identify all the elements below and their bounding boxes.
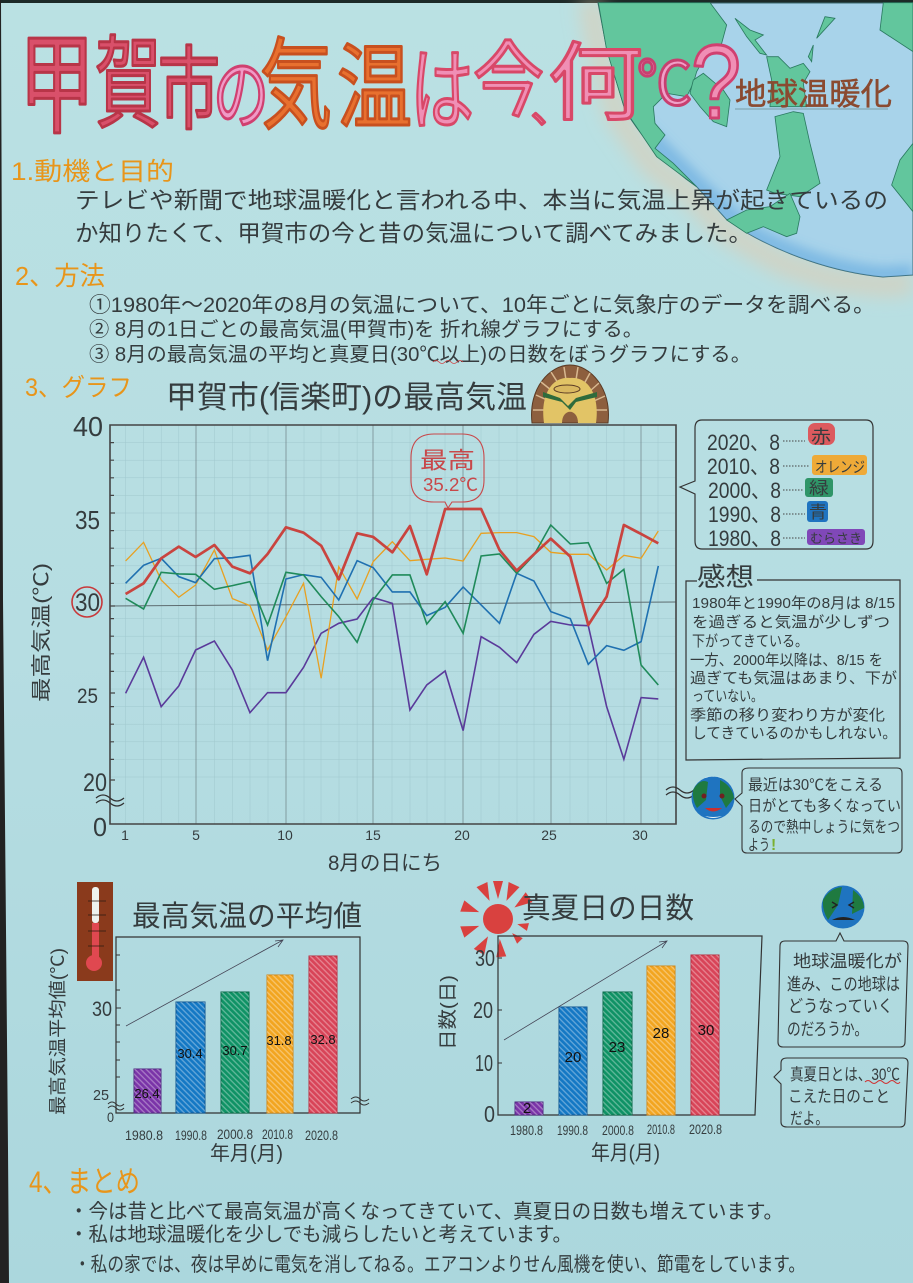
y axis labels: 40	[73, 411, 103, 442]
callout: highest temperature	[411, 434, 484, 508]
title: 市	[158, 41, 220, 141]
axis break marks	[96, 787, 694, 806]
y axis labels: midsummer bars	[473, 945, 495, 1127]
legend text: 緑	[809, 479, 829, 498]
title: 、	[531, 87, 571, 131]
x axis labels: temperature bars: 2010.8	[262, 1126, 293, 1142]
y axis labels: midsummer bars: 0	[484, 1101, 495, 1127]
bar values: 31.8	[266, 1033, 292, 1048]
title: ?	[691, 24, 741, 141]
y axis labels: temperature bars: 0	[107, 1109, 114, 1125]
legend text: むらさき	[810, 531, 862, 546]
y axis labels: 30	[75, 589, 100, 617]
heading: section 2: 2、方法	[15, 261, 105, 291]
callout: what will happen to earth	[778, 933, 908, 1047]
title: 今	[473, 36, 544, 127]
bar values	[134, 1032, 336, 1101]
panel: impressions	[686, 562, 900, 760]
title: 賀	[95, 29, 161, 141]
subtitle: global warming: 地球温暖化	[735, 77, 892, 112]
callout: heatstroke warning	[735, 768, 902, 854]
text block: method: ③ 8月の最高気温の平均と真夏日(30℃以上)の日数をぼうグラフにする。	[89, 343, 751, 366]
bar values: 30	[698, 1022, 714, 1039]
highlight: 30 degree circle	[72, 587, 102, 617]
legend text: 2020、8	[707, 430, 780, 455]
x axis labels: 30	[632, 827, 648, 843]
legend text: 1990、8	[708, 502, 781, 527]
x axis labels: temperature bars: 2020.8	[305, 1127, 338, 1143]
bar values: 30.4	[177, 1046, 203, 1061]
x axis labels: 15	[365, 827, 381, 843]
legend swatches	[805, 423, 867, 545]
callout: what will happen to earth: のだろうか。	[787, 1020, 868, 1039]
text block: method: ② 8月の1日ごとの最高気温(甲賀市)を 折れ線グラフにする。	[89, 318, 643, 341]
x axis labels: midsummer bars: 2010.8	[647, 1121, 675, 1137]
title	[19, 24, 741, 148]
icon: hedgehog	[532, 365, 608, 423]
callout: midsummer day definition	[774, 1058, 908, 1128]
heading: section 4: 4、まとめ	[29, 1166, 140, 1199]
title: は	[410, 42, 474, 142]
y axis labels: temperature bars: 25	[93, 1087, 109, 1104]
x axis title: temperature bars: 年月(月)	[210, 1142, 283, 1165]
bar values: 20	[565, 1049, 581, 1066]
impressions text	[690, 595, 897, 742]
callout: what will happen to earth: どうなっていく	[788, 997, 893, 1016]
bar values: 26.4	[134, 1086, 160, 1101]
title: の	[213, 51, 269, 139]
text block: summary: ・私は地球温暖化を少しでも減らしたいと考えています。	[69, 1223, 572, 1246]
bar: 1990	[559, 1007, 587, 1115]
callout: highest temperature: 最高	[420, 447, 475, 473]
callout: midsummer day definition: こえた日のこと	[788, 1087, 890, 1106]
legend text: 1980、8	[708, 526, 781, 551]
series: 1990 blue	[126, 555, 658, 664]
bar: 1980	[134, 1069, 161, 1113]
x axis labels: temperature bars: 2000.8	[217, 1126, 253, 1142]
x axis labels: midsummer bars: 2020.8	[689, 1121, 722, 1137]
chart frame	[110, 425, 676, 824]
bar: 2010	[267, 975, 293, 1113]
text block: summary	[69, 1200, 805, 1276]
title: 何	[548, 37, 643, 132]
callout: what will happen to earth: 地球温暖化が	[793, 952, 902, 971]
x axis labels: temperature bars	[125, 1126, 338, 1143]
x axis labels: midsummer bars: 1980.8	[510, 1122, 543, 1138]
callout: heatstroke warning: 最近は30℃をこえる	[748, 776, 883, 794]
legend text: オレンジ	[815, 459, 865, 476]
impressions text: 下がってきている。	[692, 633, 808, 650]
bar chart: average high temperature	[108, 937, 369, 1113]
heading: section 3: 3、グラフ	[25, 374, 132, 402]
callout: heatstroke warning: よう	[748, 837, 770, 854]
text block: summary: ・今は昔と比べて最高気温が高くなってきていて、真夏日の日数も増えています。	[69, 1200, 783, 1223]
series: 2020 red	[126, 509, 658, 625]
bar: 1990	[176, 1002, 205, 1113]
line chart	[110, 425, 676, 824]
callout: heatstroke warning: !	[771, 837, 776, 854]
impressions text: 季節の移り変わり方が変化	[690, 707, 885, 724]
title: 甲	[19, 25, 95, 148]
y axis labels: 20	[83, 769, 107, 797]
y axis labels: temperature bars: 30	[92, 998, 112, 1021]
series: 1980 purple	[126, 598, 658, 759]
impressions text: 一方、2000年以降は、8/15 を	[690, 652, 883, 669]
callout: midsummer day definition: だよ。	[790, 1110, 828, 1128]
x axis title: midsummer bars: 年月(月)	[591, 1142, 660, 1165]
bar: 2020	[691, 955, 719, 1115]
text block: method	[89, 294, 875, 366]
bar: 2020	[309, 956, 337, 1113]
y axis labels	[73, 411, 107, 842]
x axis labels: temperature bars: 1980.8	[125, 1127, 163, 1143]
impressions text: っていない。	[692, 688, 763, 705]
trend arrow	[504, 941, 667, 1040]
bar chart: midsummer days	[498, 936, 762, 1117]
x axis labels: midsummer bars: 1990.8	[557, 1122, 588, 1138]
bar values: 2	[523, 1100, 531, 1117]
x axis labels: 5	[192, 827, 200, 843]
icon: worried earth	[822, 886, 864, 928]
text block: motivation: テレビや新聞で地球温暖化と言われる中、本当に気温上昇が起きているの	[75, 187, 888, 213]
text block: method: ①1980年～2020年の8月の気温について、10年ごとに気象庁のデータを調べる。	[89, 294, 875, 317]
callout: highest temperature: 35.2℃	[423, 475, 478, 495]
impressions text: 過ぎても気温はあまり、下が	[690, 670, 897, 687]
chart title: 甲賀市(信楽町)の最高気温	[166, 380, 527, 415]
series: 2010 orange	[126, 531, 658, 678]
x axis title: 8月の日にち	[328, 852, 442, 875]
bar values: 32.8	[310, 1032, 336, 1047]
x axis labels	[121, 827, 648, 843]
bar values: 30.7	[222, 1043, 248, 1058]
y axis labels: midsummer bars: 10	[475, 1050, 493, 1076]
title: 気	[260, 30, 332, 141]
bar values: 23	[609, 1039, 625, 1056]
heading: average temperature chart: 最高気温の平均値	[132, 900, 362, 933]
x axis labels: temperature bars: 1990.8	[175, 1127, 207, 1143]
impressions text: を過ぎると気温が少しずつ	[692, 614, 890, 631]
trend arrow	[126, 940, 283, 1026]
bar: 2000	[221, 992, 249, 1113]
legend text: 赤	[811, 427, 831, 447]
y axis labels: 35	[75, 505, 100, 535]
text block: motivation: か知りたくて、甲賀市の今と昔の気温について調べてみました。	[75, 220, 752, 246]
callout: heatstroke warning: 日がとても多くなってい	[748, 797, 901, 815]
y axis title: midsummer bars: 日数(日)	[437, 975, 459, 1050]
impressions text: してきているのかもしれない。	[692, 725, 897, 742]
bar: 2010	[647, 966, 675, 1115]
y axis ticks	[110, 443, 115, 780]
icon: sun	[460, 881, 533, 957]
y axis labels: 0	[93, 812, 107, 842]
legend text: 2000、8	[708, 478, 781, 503]
icon: thermometer	[77, 882, 113, 981]
y axis title: temperature bars: 最高気温平均値(℃)	[48, 948, 68, 1115]
x axis labels: 1	[121, 827, 129, 843]
bar: 2000	[603, 992, 632, 1115]
legend	[680, 420, 873, 551]
bar values: 28	[653, 1025, 669, 1042]
icon: earth illustration	[590, 0, 913, 285]
bar: 1980	[515, 1102, 543, 1115]
series: 2000 green	[126, 525, 658, 685]
chart gridlines	[110, 425, 676, 824]
bar values	[523, 1022, 714, 1117]
legend text: 2010、8	[707, 454, 780, 479]
heading: section 1: 1.動機と目的	[11, 158, 174, 186]
y axis labels: 25	[77, 685, 98, 708]
y axis labels: midsummer bars: 20	[473, 997, 493, 1023]
heading: midsummer days chart: 真夏日の日数	[522, 892, 694, 925]
panel: impressions: 感想	[697, 562, 754, 592]
x axis labels: 10	[277, 827, 293, 843]
title: 温	[337, 38, 412, 140]
y axis title: 最高気温(℃)	[30, 563, 53, 702]
y axis labels: temperature bars	[92, 998, 114, 1125]
x axis labels: 25	[541, 827, 557, 843]
legend text	[707, 427, 865, 551]
x axis labels: 20	[454, 827, 470, 843]
y axis labels: midsummer bars: 30	[475, 945, 495, 971]
legend text: 青	[809, 503, 827, 522]
impressions text: 1980年と1990年の8月は 8/15	[692, 595, 895, 612]
x axis labels: midsummer bars: 2000.8	[602, 1122, 634, 1138]
text block: motivation	[75, 187, 888, 246]
icon: smiling earth	[692, 776, 734, 820]
x axis labels: midsummer bars	[510, 1121, 722, 1138]
title: ℃	[637, 51, 692, 118]
